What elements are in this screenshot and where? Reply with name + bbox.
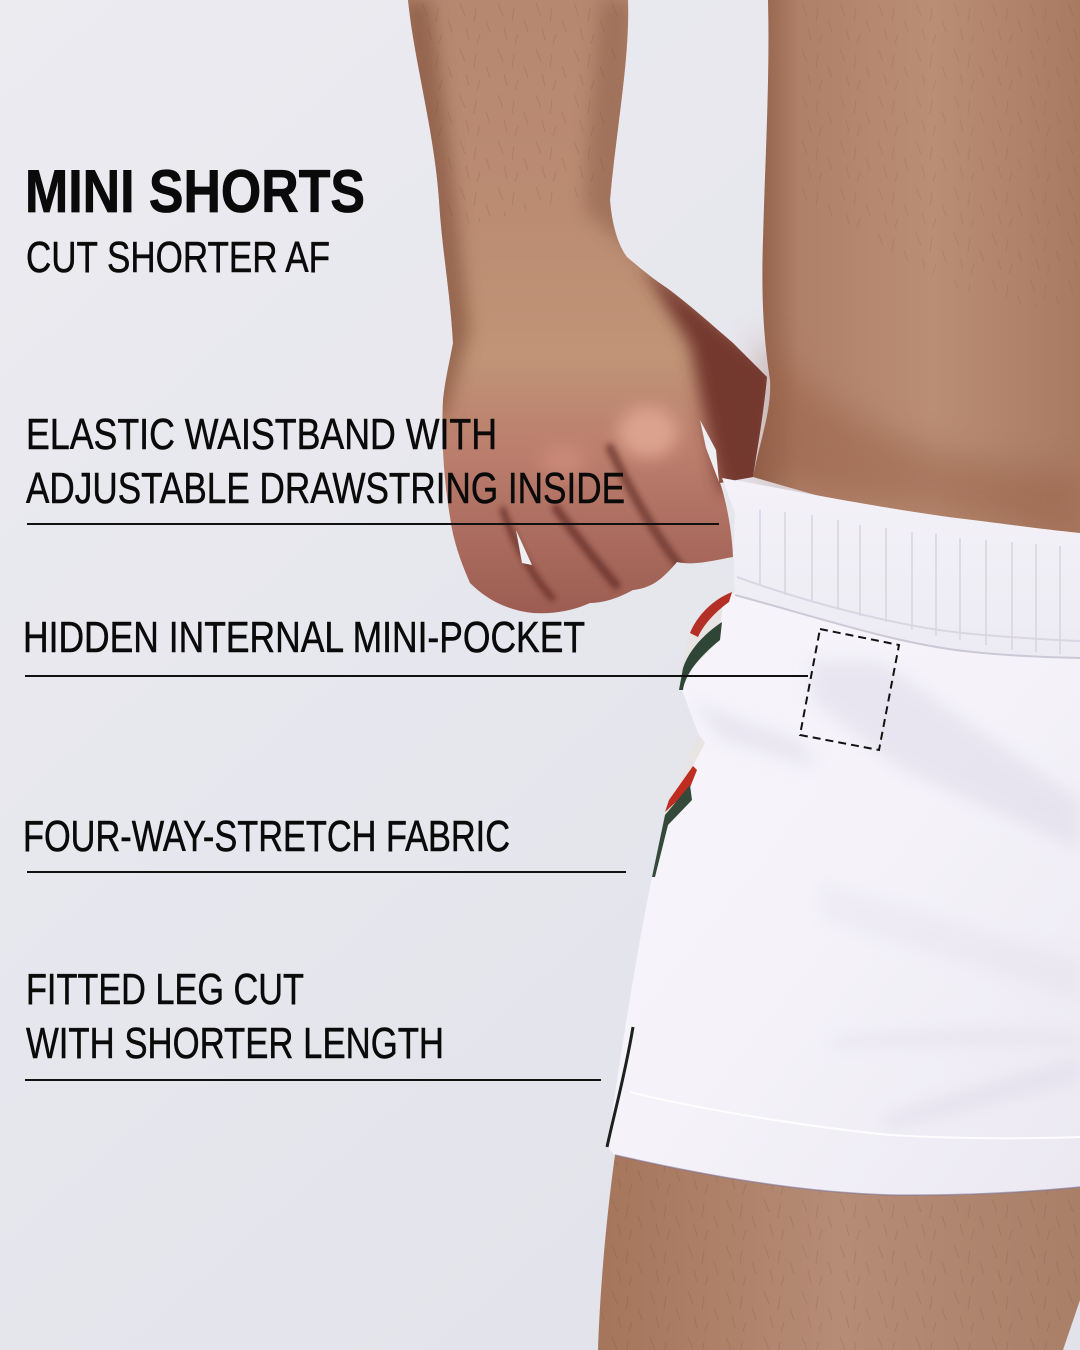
icon: dashed hidden pocket outline xyxy=(800,629,899,750)
hem stitch xyxy=(630,1092,1080,1138)
callout: stretch fabric: FOUR-WAY-STRETCH FABRIC xyxy=(23,812,510,861)
torso lower shading xyxy=(755,330,1080,540)
upper side stripe xyxy=(678,590,735,690)
subtitle: CUT SHORTER AF xyxy=(26,233,330,282)
shorts body xyxy=(607,592,1080,1195)
waistband lower casing xyxy=(737,577,1080,641)
side seam xyxy=(607,1027,633,1147)
callout: hidden pocket: HIDDEN INTERNAL MINI-POCKET xyxy=(23,613,585,662)
knuckle highlight large xyxy=(618,406,678,458)
callout: elastic waistband xyxy=(26,410,719,524)
arm hair texture xyxy=(420,0,620,230)
waistband gathers xyxy=(760,510,1060,654)
hem bottom edge xyxy=(615,1155,1080,1195)
small gap by the thumb xyxy=(700,420,719,482)
torso xyxy=(753,0,1080,540)
knuckle highlight small xyxy=(542,447,584,476)
title: MINI SHORTS xyxy=(25,158,365,225)
callout: elastic waistband: ADJUSTABLE DRAWSTRING INSIDE xyxy=(26,464,625,513)
arm right edge shading xyxy=(582,0,628,250)
arm left edge shading xyxy=(400,0,470,420)
callout: fitted leg cut: WITH SHORTER LENGTH xyxy=(26,1019,444,1068)
thumb shadow area xyxy=(638,268,767,499)
callout: fitted leg cut: FITTED LEG CUT xyxy=(26,965,304,1014)
leg hair texture xyxy=(598,1160,1080,1350)
photo: model wearing white mini shorts xyxy=(400,0,1080,1350)
shorts soft folds xyxy=(690,660,1080,1128)
leg xyxy=(598,1155,1080,1350)
callout: fitted leg cut xyxy=(25,965,601,1080)
finger separations xyxy=(503,448,680,598)
torso hair texture xyxy=(800,0,1080,306)
lower side stripe xyxy=(652,733,705,877)
waistband seam xyxy=(735,595,1080,658)
arm and hand xyxy=(400,0,780,620)
callout: elastic waistband: ELASTIC WAISTBAND WITH xyxy=(26,410,497,459)
waistband xyxy=(722,478,1080,658)
small gap between pinky fingers xyxy=(516,530,532,565)
